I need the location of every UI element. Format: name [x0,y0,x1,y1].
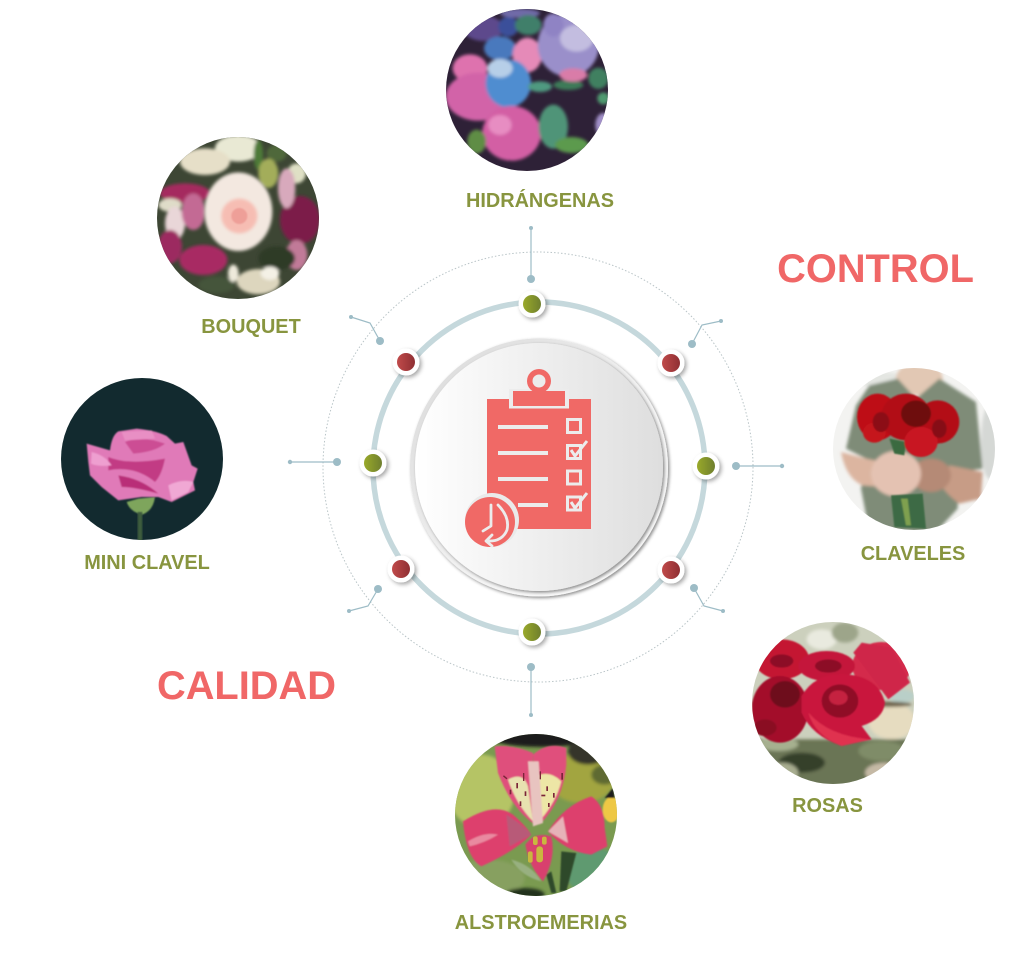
central disc [410,338,668,596]
connector: top left [349,315,384,345]
node: bottom [518,618,546,646]
photo: bouquet [157,137,319,299]
label: rosas: ROSAS [792,795,863,817]
icon: clipboard with clock [465,369,591,547]
photo: alstroemerias [455,734,617,896]
photo: claveles [833,368,995,530]
node: bottom left [388,556,414,582]
connector: bottom left [347,585,382,613]
label: mini clavel: MINI CLAVEL [84,552,210,574]
node: bottom right [658,556,684,584]
node: right [692,452,720,480]
label: bouquet: BOUQUET [201,316,301,338]
photo: hidrangeas [446,9,608,171]
connector: bottom right [690,584,725,613]
connector: right [732,462,784,470]
node: top [518,290,546,318]
photo: rosas [752,622,914,784]
node: top right [658,350,684,376]
dotted outer ring [323,252,753,682]
connector: top right [688,319,723,348]
label: alstroemerias: ALSTROEMERIAS [455,912,627,934]
thick ring [373,302,705,634]
photo: mini clavel [61,378,223,540]
label: claveles: CLAVELES [861,543,965,565]
label: hidrangenas: HIDRÁNGENAS [466,189,614,212]
connector: top [527,226,535,283]
node: top left [392,348,420,376]
node: left [360,450,386,476]
connector: bottom [527,663,535,717]
heading: control: CONTROL [777,247,974,291]
heading: calidad: CALIDAD [157,664,336,708]
connector: left [288,458,341,466]
